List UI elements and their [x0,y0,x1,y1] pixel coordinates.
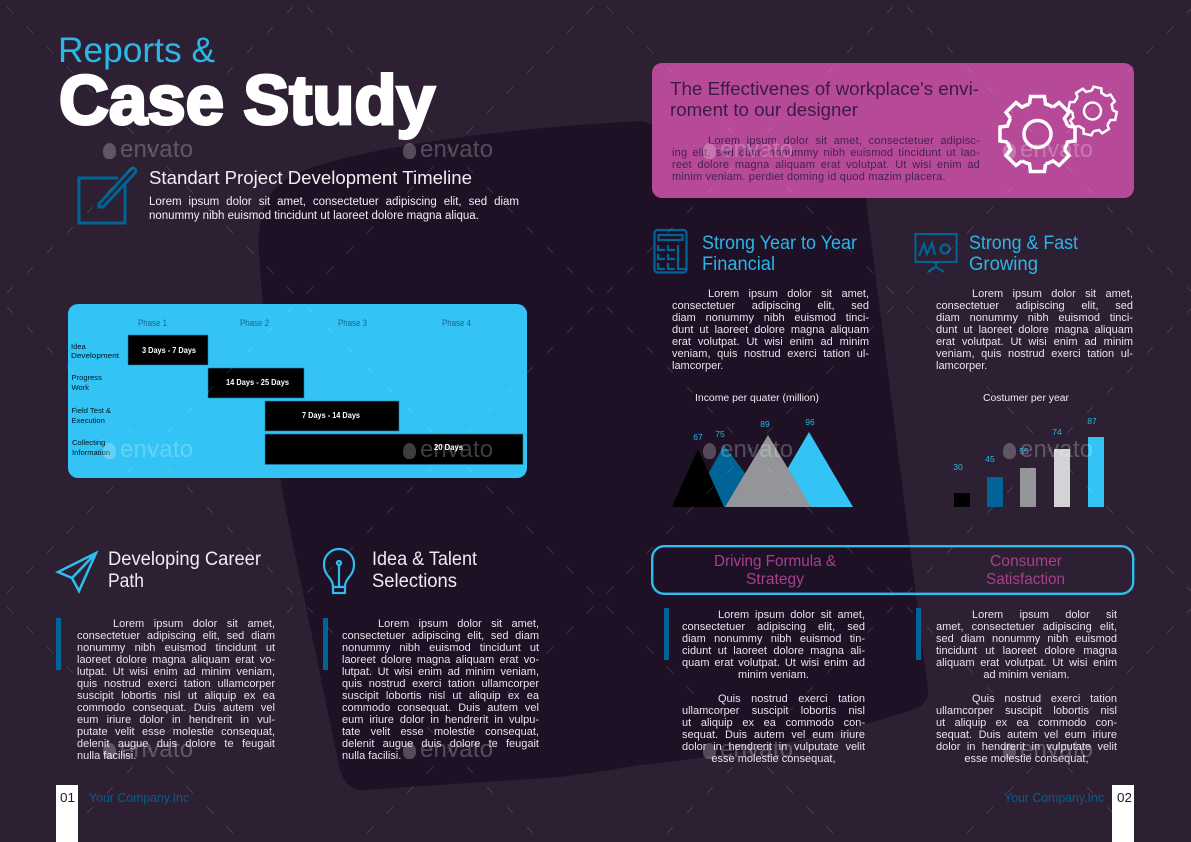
gantt bar labels [142,346,464,452]
watermark: envato stamps: envato [120,736,193,763]
text: timeline intro [149,196,519,222]
text: career body: lutpat. Ut wisi enim ad minim veniam, [77,666,275,678]
watermark: envato stamps: envato [420,436,493,463]
text: formula body: ut aliquip ex ea commodo con- [682,717,865,729]
icon: presentation board [916,234,956,272]
icon: light bulb [324,549,354,593]
phase labels: Phase 4 [442,318,471,328]
text: talent body: eum iriure dolor in hendrerit in vulpu- [342,714,539,726]
text: formula body: diam nonummy nibh euismod tin- [682,633,865,645]
gantt bar labels: 3 Days - 7 Days [142,346,197,355]
heading: idea and talent [372,549,478,592]
row labels: Field Test & [72,406,111,415]
phase labels [138,318,471,328]
text: satisfaction body [936,609,1117,765]
text: callout body: reet dolore magna aliquam erat volutpat. Ut wisi enim ad [672,159,980,171]
icon: gears [1000,82,1121,172]
heading: idea and talent: Idea & Talent [372,549,478,570]
phase labels: Phase 2 [240,318,269,328]
chart: income per quarter: Income per quater (million) [695,393,819,404]
chart: customers per year: 87 [1087,416,1097,426]
text: timeline intro: Lorem ipsum dolor sit amet, consectetuer adipiscing elit, sed diam [149,196,519,208]
heading: developing career path: Developing Career [108,549,262,570]
chart: customers per year [953,393,1104,507]
panel: gantt chart [68,304,527,478]
text: financial body: veniam, quis nostrud exerci tation ul- [672,348,869,360]
text: callout body: ing elit, sed diam nonummy nibh euismod tincidunt ut lao- [672,147,980,159]
text: talent body: quis nostrud exerci tation ullamcorper [342,678,539,690]
text: growing body: dunt ut laoreet dolore magna aliquam [936,324,1133,336]
icon: paper plane [58,553,96,591]
watermark: envato stamps: envato [720,136,793,163]
chart: customers per year: 74 [1052,427,1062,437]
heading: strong year to year [702,233,858,275]
text: talent body: consectetuer adipiscing elit, sed diam [342,630,539,642]
text: financial body: dunt ut laoreet dolore magna aliquam [672,324,869,336]
text: growing body [936,288,1133,372]
panel: outlined heading bar: Consumer [990,553,1063,570]
text: financial body: consectetuer adipiscing elit, sed [672,300,869,312]
text: talent body: lutpat. Ut wisi enim ad minim veniam, [342,666,539,678]
text: satisfaction body: ullamcorper suscipit lobortis nisl [936,705,1117,717]
chart: income per quarter [672,393,853,507]
text: career body [77,618,275,762]
heading: developing career path: Path [108,571,144,592]
accent bars [56,608,921,670]
text: career body: Lorem ipsum dolor sit amet, [113,618,275,630]
heading: strong and fast: Strong & Fast [969,233,1079,254]
text: formula body: ullamcorper suscipit lobortis nisl [682,705,865,717]
text: financial body: lamcorper. [672,360,723,372]
text: satisfaction body: aliquam erat volutpat. Ut wisi enim [936,657,1117,669]
footer: page 01: 01 [60,791,75,805]
text: formula body: dolor in hendrerit in vulputate velit [682,741,865,753]
watermark: envato stamps: envato [120,136,193,163]
text: career body: delenit augue duis dolore te feugait [77,738,275,750]
row labels: Collecting [72,438,105,447]
row labels: Execution [72,416,105,425]
watermark: envato stamps: envato [1020,736,1093,763]
text: career body: commodo consequat. Duis autem vel [77,702,275,714]
panel: outlined heading bar: Strategy [746,571,804,588]
text: career body: nonummy nibh euismod tincidunt ut [77,642,275,654]
footer: page 01: Your Company.Inc [89,791,189,805]
chart: customers per year: Costumer per year [983,393,1070,404]
heading: strong and fast: Growing [969,254,1038,275]
text: callout body: minim veniam. perdiet doming id quod mazim placera. [672,171,946,183]
watermark: envato stamps: envato [420,136,493,163]
row labels: Information [72,448,110,457]
text: satisfaction body: sed diam nonummy nibh euismod [936,633,1117,645]
text: formula body [682,609,865,765]
gantt bar labels: 14 Days - 25 Days [226,378,290,387]
heading: strong year to year: Financial [702,254,775,275]
text: talent body: laoreet dolore magna aliquam erat vo- [342,654,539,666]
panel: effectiveness callout: roment to our designer [670,99,858,120]
text: callout body: Lorem ipsum dolor sit amet, consectetuer adipisc- [708,135,980,147]
text: callout body [672,135,980,183]
icon: calculator [654,230,686,272]
panel: outlined heading bar: Satisfaction [986,571,1065,588]
text: talent body: nulla facilisi. [342,750,401,762]
gantt bar labels: 20 Days [434,443,464,452]
text: career body: consectetuer adipiscing elit, sed diam [77,630,275,642]
watermark: envato stamps: envato [720,436,793,463]
watermark: envato stamps: envato [720,736,793,763]
chart: customers per year: 30 [953,462,963,472]
text: satisfaction body: esse molestie consequat, [964,753,1089,765]
watermark: envato stamps: envato [120,436,193,463]
text: satisfaction body: Lorem ipsum dolor sit [972,609,1117,621]
panel: outlined heading bar [652,546,1133,594]
heading: idea and talent: Selections [372,571,457,592]
text: financial body: erat volutpat. Ut wisi enim ad minim [672,336,869,348]
text: career body: putate velit esse molestie consequat, [77,726,275,738]
text: formula body: Quis nostrud exerci tation [718,693,865,705]
icon: edit note [79,168,136,223]
text: career body: laoreet dolore magna aliquam erat vo- [77,654,275,666]
panel: effectiveness callout: The Effectivenes of workplace's envi- [670,78,979,99]
phase labels: Phase 1 [138,318,167,328]
row labels [71,342,120,457]
text: formula body: esse molestie consequat, [711,753,836,765]
text: satisfaction body: dolor in hendrerit in vulputate velit [936,741,1117,753]
text: formula body: consectetuer adipiscing elit, sed [682,621,865,633]
chart: customers per year: 45 [985,454,995,464]
text: satisfaction body: ut aliquip ex ea commodo con- [936,717,1117,729]
text: formula body: cidunt ut laoreet dolore magna ali- [682,645,865,657]
text: timeline intro: nonummy nibh euismod tincidunt ut laoreet dolore magna aliqua. [149,210,479,222]
text: growing body: erat volutpat. Ut wisi enim ad minim [936,336,1133,348]
text: talent body: delenit augue duis dolore te feugait [342,738,539,750]
text: talent body: nonummy nibh euismod tincidunt ut [342,642,539,654]
phase labels: Phase 3 [338,318,367,328]
title: Reports & [58,31,215,70]
heading: timeline: Standart Project Development Timeline [149,168,472,188]
footer: page 01 [56,785,189,842]
text: talent body: commodo consequat. Duis autem vel [342,702,539,714]
row labels: Progress [72,373,102,382]
chart: income per quarter: 96 [805,417,815,427]
footer: page 02 [1004,785,1134,842]
row labels: Work [72,383,89,392]
heading: strong and fast [969,233,1079,275]
footer: page 02: 02 [1117,791,1132,805]
text: formula body: quam erat volutpat. Ut wisi enim ad [682,657,865,669]
chart: income per quarter: 75 [715,429,725,439]
chart: customers per year: 55 [1019,446,1029,456]
footer: page 02: Your Company.Inc [1004,791,1104,805]
watermark: envato stamps: envato [1020,436,1093,463]
text: satisfaction body: ad minim veniam. [983,669,1070,681]
text: career body: suscipit lobortis nisl ut aliquip ex ea [77,690,275,702]
text: growing body: Lorem ipsum dolor sit amet, [972,288,1133,300]
text: formula body: minim veniam. [738,669,809,681]
heading: strong year to year: Strong Year to Year [702,233,858,254]
text: formula body: sequat. Duis autem vel eum iriure [682,729,865,741]
heading: developing career path [108,549,262,592]
text: talent body [342,618,539,762]
text: growing body: consectetuer adipiscing elit, sed [936,300,1133,312]
text: talent body: Lorem ipsum dolor sit amet, [378,618,539,630]
title: Case Study [59,61,435,139]
text: growing body: veniam, quis nostrud exerci tation ul- [936,348,1133,360]
text: satisfaction body: amet, consectetuer adipiscing elit, [936,621,1117,633]
row labels: Idea [71,342,87,351]
panel: outlined heading bar: Driving Formula & [714,553,836,570]
text: growing body: diam nonummy nibh euismod tinci- [936,312,1133,324]
text: talent body: tate velit esse molestie consequat, [342,726,539,738]
text: formula body: Lorem ipsum dolor sit amet, [718,609,865,621]
text: career body: eum iriure dolor in hendrerit in vul- [77,714,275,726]
text: talent body: suscipit lobortis nisl ut aliquip ex ea [342,690,539,702]
panel: effectiveness callout [652,63,1134,198]
text: financial body [672,288,869,372]
watermark: envato stamps: envato [1020,136,1093,163]
watermark: envato stamps: envato [420,736,493,763]
gantt bar labels: 7 Days - 14 Days [302,411,361,420]
text: satisfaction body: Quis nostrud exerci tation [972,693,1117,705]
text: financial body: Lorem ipsum dolor sit amet, [708,288,869,300]
chart: income per quarter: 89 [760,419,770,429]
chart: income per quarter: 67 [693,432,703,442]
row labels: Development [71,351,120,360]
text: growing body: lamcorper. [936,360,987,372]
text: career body: nulla facilisi. [77,750,136,762]
gantt bars [128,335,523,464]
text: financial body: diam nonummy nibh euismod tinci- [672,312,869,324]
text: satisfaction body: tincidunt ut laoreet dolore magna [936,645,1117,657]
text: career body: quis nostrud exerci tation ullamcorper [77,678,275,690]
text: satisfaction body: sequat. Duis autem vel eum iriure [936,729,1117,741]
